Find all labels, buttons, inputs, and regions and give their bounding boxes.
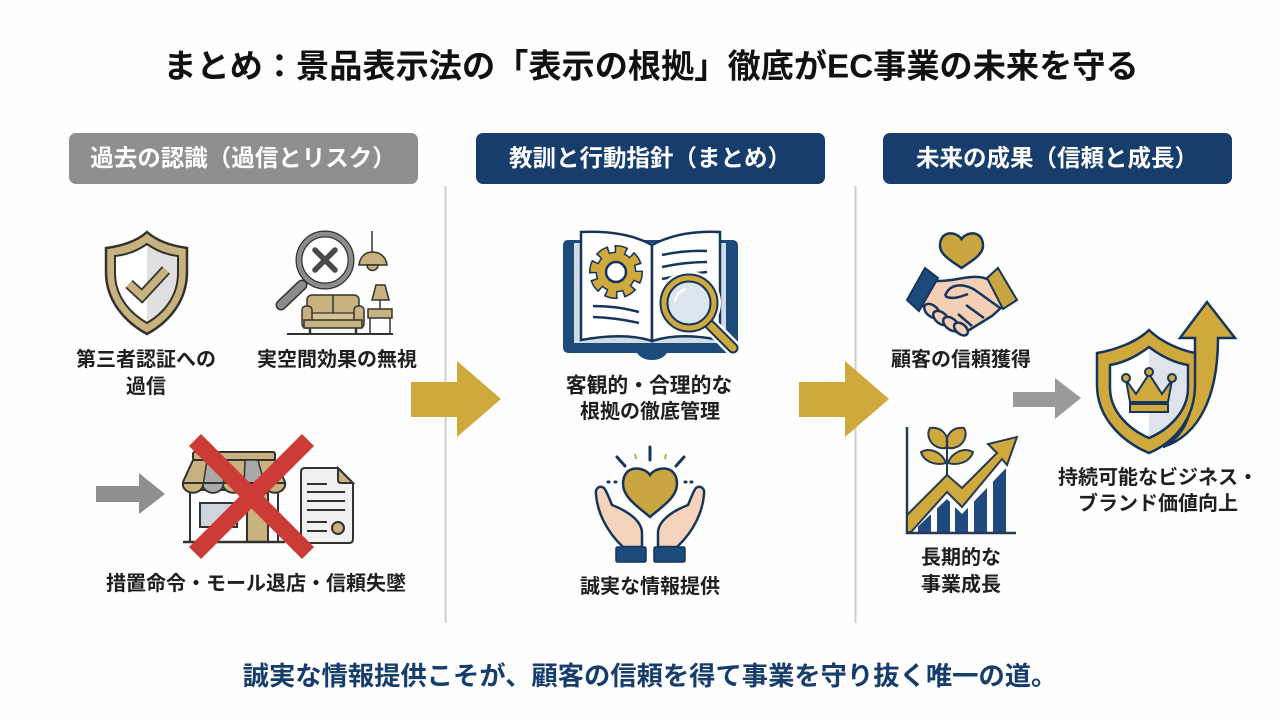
- panel: lessons: [476, 133, 825, 598]
- icon: book with gear and magnifier: [563, 232, 738, 360]
- arrow: gray left: [96, 473, 165, 514]
- label: management: 根拠の徹底管理: [580, 400, 720, 423]
- panel: past recognition: [69, 133, 418, 595]
- label: sustainable business: 持続可能なビジネス・: [1058, 466, 1258, 489]
- icon: store with red cross and document: [183, 440, 353, 553]
- label: long-term growth: 事業成長: [921, 572, 1001, 596]
- label: real space: 実空間効果の無視: [257, 348, 417, 371]
- heading: lessons: 教訓と行動指針（まとめ）: [509, 145, 791, 171]
- label: management: [566, 374, 732, 423]
- label: long-term growth: [921, 546, 1001, 596]
- label: sustainable business: ブランド価値向上: [1078, 491, 1238, 515]
- label: long-term growth: 長期的な: [921, 546, 1001, 569]
- label: management: 客観的・合理的な: [566, 374, 732, 398]
- panel: future results: [883, 133, 1258, 596]
- label: honest information: 誠実な情報提供: [580, 575, 720, 598]
- title: まとめ：景品表示法の「表示の根拠」徹底がEC事業の未来を守る: [163, 48, 1139, 86]
- arrow: gold second: [799, 361, 889, 437]
- label: customer trust: 顧客の信頼獲得: [891, 348, 1031, 371]
- icon: magnifier and furniture: [281, 231, 393, 334]
- conclusion text: 誠実な情報提供こそが、顧客の信頼を得て事業を守り抜く唯一の道。: [243, 661, 1057, 691]
- label: third party: 第三者認証への: [76, 348, 216, 371]
- arrow: gold first: [411, 361, 501, 437]
- heading: lessons: [476, 133, 825, 184]
- label: third party: [76, 348, 216, 398]
- arrow: gray right: [1013, 378, 1081, 419]
- label: third party: 過信: [126, 375, 166, 398]
- icon: hands and heart: [596, 447, 704, 562]
- label: consequences: 措置命令・モール退店・信頼失墜: [106, 572, 406, 595]
- icon: handshake and heart: [907, 233, 1017, 338]
- heading: past: [69, 133, 418, 184]
- heading: future: 未来の成果（信頼と成長）: [916, 145, 1198, 171]
- label: sustainable business: [1058, 466, 1258, 515]
- heading: past: 過去の認識（過信とリスク）: [90, 145, 396, 171]
- heading: future: [883, 133, 1232, 184]
- icon: shield with crown and arrow: [1097, 302, 1235, 453]
- icon: growth chart with plant: [907, 427, 1017, 536]
- icon: shield check: [106, 232, 187, 334]
